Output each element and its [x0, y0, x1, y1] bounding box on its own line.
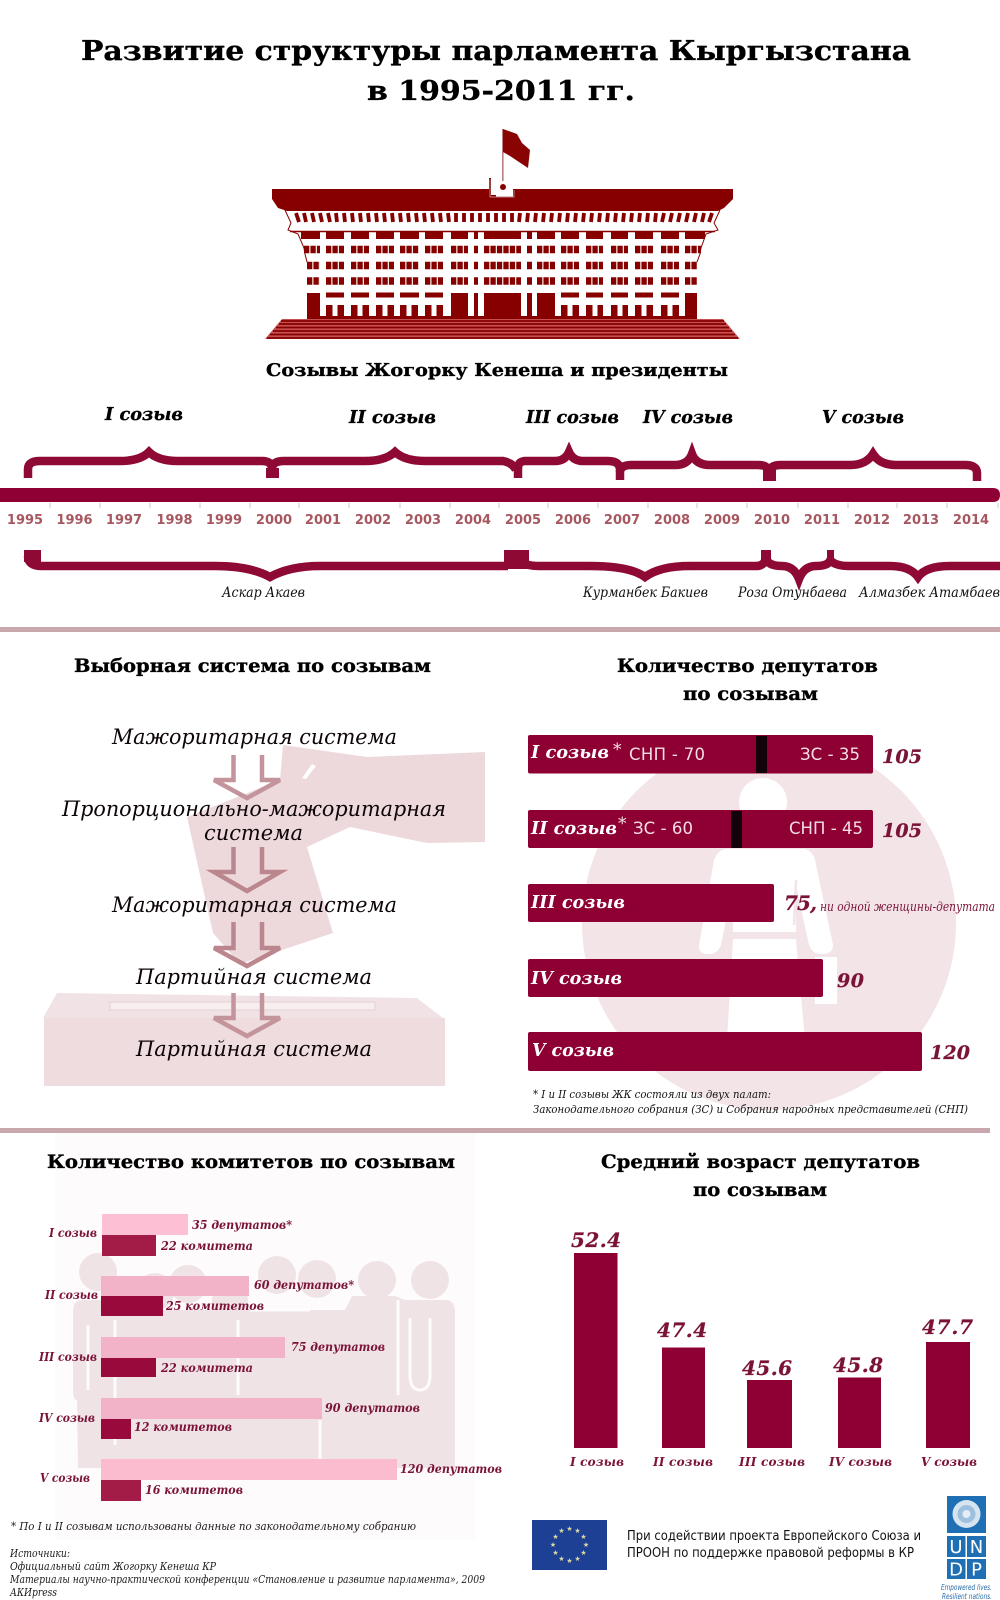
system labels: Пропорционально-мажоритарная	[61, 797, 446, 821]
bar: I	[528, 735, 922, 774]
year labels: 1998	[156, 513, 193, 528]
convocation labels	[104, 404, 904, 428]
year labels	[7, 513, 989, 528]
logo: EU flag: ★	[566, 1525, 573, 1533]
heading: Средний возраст депутатов	[601, 1152, 920, 1173]
convocation labels: V созыв	[822, 407, 904, 428]
bar: II: ЗС - 60	[633, 819, 693, 838]
values: 47.7	[922, 1315, 973, 1339]
bar: I: 105	[882, 746, 922, 768]
footnote and sources: АКИpress	[9, 1586, 57, 1599]
convocation labels: IV созыв	[642, 407, 733, 428]
title: в 1995-2011 гг.	[367, 76, 635, 107]
title	[81, 36, 911, 107]
panel: committees	[9, 1133, 502, 1599]
bar: II: II созыв	[530, 818, 617, 839]
values: 45.8	[833, 1353, 883, 1377]
president names: Аскар Акаев	[221, 585, 305, 601]
bar values: 120 депутатов	[400, 1462, 502, 1476]
category labels: V созыв	[921, 1455, 977, 1469]
year labels: 2011	[804, 513, 840, 528]
footnote and sources: Источники:	[9, 1547, 70, 1560]
heading: по созывам	[693, 1180, 827, 1201]
logo: EU flag: ★	[558, 1527, 565, 1535]
convocation labels: V созыв	[40, 1471, 90, 1485]
year labels: 2001	[305, 513, 341, 528]
background: ballot box	[43, 993, 445, 1086]
bar: I: *	[613, 740, 622, 760]
logo: EU flag: ★	[574, 1555, 581, 1563]
heading: Количество комитетов по созывам	[47, 1152, 455, 1173]
bar values: 12 комитетов	[134, 1420, 232, 1434]
panel: number of deputies	[528, 656, 995, 1116]
logo: EU flag: ★	[566, 1557, 573, 1565]
background: hand with ballot	[187, 745, 485, 964]
system labels: система	[204, 821, 303, 845]
logo: EU flag: ★	[552, 1533, 559, 1541]
year labels: 1996	[56, 513, 93, 528]
category labels: I созыв	[569, 1455, 624, 1469]
convocation labels: III созыв	[38, 1350, 97, 1364]
category labels: II созыв	[652, 1455, 713, 1469]
bar: II: 105	[882, 820, 922, 842]
president names: Курманбек Бакиев	[582, 585, 708, 601]
logo: EU flag: ★	[552, 1549, 559, 1557]
bar: V: 120	[930, 1042, 970, 1064]
year labels: 2007	[604, 513, 640, 528]
system labels	[61, 725, 446, 1061]
bar values: 16 комитетов	[145, 1483, 243, 1497]
support text: ПРООН по поддержке правовой реформы в КР	[627, 1546, 914, 1561]
footnote and sources: * По I и II созывам использованы данные по законодательному собранию	[11, 1520, 416, 1533]
convocation labels: II созыв	[44, 1288, 98, 1302]
bar values: 60 депутатов*	[254, 1278, 355, 1292]
bar: V: V созыв	[532, 1040, 614, 1061]
panel: electoral system	[43, 656, 485, 1086]
logo: UNDP: P	[971, 1560, 982, 1580]
year labels: 1999	[206, 513, 242, 528]
support text: При содействии проекта Европейского Союза и	[627, 1529, 921, 1544]
president braces	[24, 550, 1000, 579]
bar: II: СНП - 45	[789, 819, 863, 838]
bar values: 90 депутатов	[325, 1401, 420, 1415]
bar values: 22 комитета	[160, 1361, 253, 1375]
year labels: 2012	[854, 513, 890, 528]
year labels: 2006	[555, 513, 591, 528]
year labels: 2000	[256, 513, 292, 528]
president names	[221, 585, 1000, 601]
bar: I: СНП - 70	[629, 745, 705, 764]
title: Развитие структуры парламента Кыргызстана	[81, 36, 911, 67]
year labels: 2014	[953, 513, 989, 528]
year labels: 1997	[106, 513, 142, 528]
footnote: * I и II созывы ЖК состояли из двух палат:	[533, 1087, 771, 1101]
bar: III: III созыв	[530, 892, 625, 913]
bar values: 35 депутатов*	[192, 1218, 293, 1232]
convocation labels: III созыв	[525, 407, 619, 428]
system labels: Партийная система	[135, 965, 372, 989]
bar values: 75 депутатов	[291, 1340, 385, 1354]
bar values	[134, 1218, 502, 1497]
convocation labels: IV созыв	[38, 1411, 95, 1425]
logo: EU flag	[532, 1520, 607, 1570]
logo: EU flag: ★	[580, 1533, 587, 1541]
logo: EU flag: ★	[558, 1555, 565, 1563]
logo: UNDP: D	[949, 1560, 963, 1580]
bar: IV	[528, 959, 864, 997]
bar: III	[528, 884, 995, 922]
convocation labels	[38, 1226, 98, 1485]
year labels: 2002	[355, 513, 391, 528]
convocation labels: I созыв	[48, 1226, 97, 1240]
values: 45.6	[742, 1356, 792, 1380]
logo: EU flag: ★	[574, 1527, 581, 1535]
arrows between systems	[214, 755, 280, 1036]
bar: V	[528, 1032, 970, 1071]
bar: I: ЗС - 35	[800, 745, 860, 764]
year labels: 1995	[7, 513, 43, 528]
timeline	[0, 404, 1000, 601]
bar: II	[528, 810, 922, 848]
system labels: Мажоритарная система	[111, 725, 397, 749]
logo: EU flag: ★	[583, 1541, 589, 1549]
panel: average age	[569, 1152, 977, 1469]
footnote and sources	[9, 1520, 485, 1599]
bar: IV: IV созыв	[530, 968, 622, 989]
illustration: parliament building	[265, 129, 740, 339]
footnote	[533, 1087, 968, 1116]
subtitle: convocations and presidents: Созывы Жогорку Кенеша и президенты	[266, 360, 728, 381]
bar: II: *	[618, 814, 627, 834]
background: deputy in circle	[582, 736, 956, 1110]
convocation labels: II созыв	[348, 407, 436, 428]
bar values: 25 комитетов	[165, 1299, 264, 1313]
bar: III: 75,	[784, 891, 817, 915]
bar: I: I созыв	[530, 742, 609, 763]
category labels: IV созыв	[828, 1455, 892, 1469]
category labels: III созыв	[738, 1455, 805, 1469]
bar: IV: 90	[837, 970, 864, 992]
category labels	[569, 1455, 977, 1469]
president names: Роза Отунбаева	[737, 585, 847, 601]
convocation labels: I созыв	[104, 404, 183, 425]
footnote and sources: Официальный сайт Жогорку Кенеша КР	[10, 1560, 217, 1573]
values: 52.4	[571, 1228, 621, 1252]
year labels: 2004	[455, 513, 491, 528]
heading: по созывам	[683, 684, 818, 705]
logo: UNDP: N	[970, 1537, 983, 1558]
logo: UNDP: U	[949, 1537, 963, 1558]
logo: EU flag: ★	[550, 1541, 556, 1549]
background: people silhouettes	[55, 1133, 475, 1540]
support text	[627, 1529, 921, 1561]
logo: EU flag: ★	[580, 1549, 587, 1557]
year labels: 2010	[754, 513, 790, 528]
heading: Выборная система по созывам	[74, 656, 431, 677]
footnote and sources: Материалы научно-практической конференции «Становление и развитие парламента», 2009	[9, 1573, 485, 1586]
year labels: 2003	[405, 513, 441, 528]
year labels: 2009	[704, 513, 740, 528]
year labels: 2005	[505, 513, 541, 528]
timeline bar	[0, 488, 1000, 502]
heading	[617, 656, 878, 705]
heading: Количество депутатов	[617, 656, 878, 677]
year labels: 2008	[654, 513, 690, 528]
values	[571, 1228, 973, 1380]
values: 47.4	[657, 1318, 707, 1342]
convocation braces	[28, 452, 977, 481]
system labels: Партийная система	[135, 1037, 372, 1061]
logo: UNDP	[941, 1496, 992, 1600]
year labels: 2013	[903, 513, 939, 528]
grouped bars	[101, 1214, 397, 1501]
bars	[574, 1253, 970, 1448]
heading	[601, 1152, 920, 1201]
bar values: 22 комитета	[160, 1239, 253, 1253]
system labels: Мажоритарная система	[111, 893, 397, 917]
